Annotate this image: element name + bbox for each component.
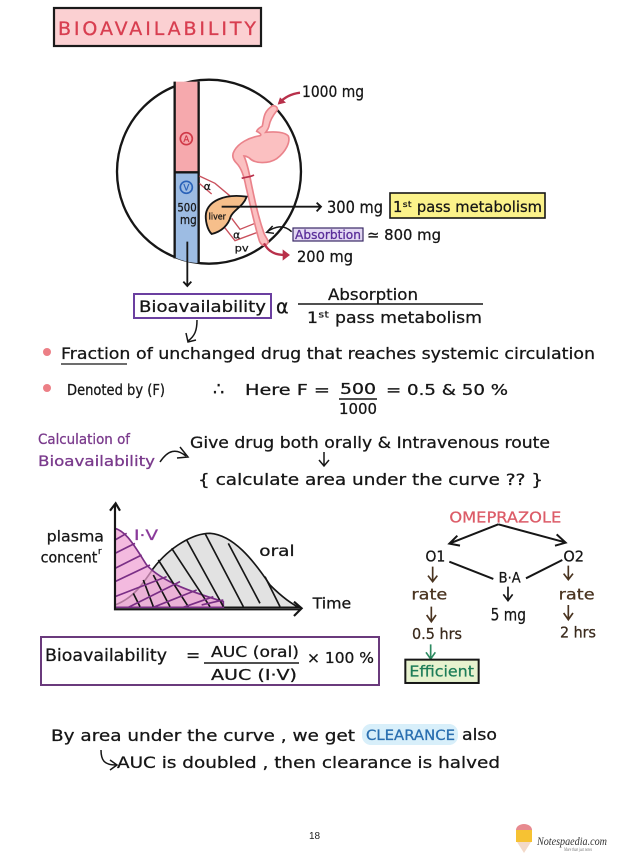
- logo: Notespaedia: [516, 824, 607, 853]
- text: calculate area: { calculate area under the curve ?? }: [198, 470, 543, 489]
- arrow: down: [319, 452, 329, 466]
- text: give drug: Give drug both orally & Intravenous route: [190, 433, 550, 452]
- bioavailability formula: Absorption: [328, 285, 418, 304]
- graph: plasma concentration vs time: I·V: [134, 528, 159, 544]
- page number: 18: [309, 831, 321, 842]
- artery column: A: [183, 135, 189, 145]
- portal vessels to liver: [199, 176, 257, 241]
- diagram: first-pass circle: α: [204, 180, 211, 193]
- O2 path: [559, 566, 596, 642]
- panel: AUC formula: [41, 637, 379, 685]
- callout: absorption: Absorbtion: [295, 228, 361, 242]
- liver: [206, 196, 247, 234]
- clearance note: [51, 724, 500, 772]
- title: BIOAVAILABILITY: [58, 18, 256, 40]
- logo: Notespaedia: More than just notes: [563, 848, 592, 853]
- clearance note: CLEARANCE: [366, 728, 455, 744]
- vein column: 500: [177, 201, 197, 215]
- graph: plasma concentration vs time: [41, 503, 351, 616]
- bullet: denoted by F: ∴: [213, 379, 224, 400]
- BA path: [491, 587, 526, 624]
- omeprazole tree: [405, 508, 596, 683]
- bullet: denoted by F: [43, 379, 508, 418]
- branch arrows: [449, 524, 566, 579]
- graph: plasma concentration vs time: concent: [41, 550, 98, 567]
- graph: plasma concentration vs time: r: [98, 547, 102, 557]
- O1 path: [411, 567, 462, 659]
- label: 300 mg: 300 mg: [327, 198, 383, 218]
- O1 path: rate: [411, 586, 447, 604]
- omeprazole tree: O2: [563, 548, 584, 566]
- clearance note: also: [462, 725, 497, 744]
- vein column: V: [183, 184, 189, 194]
- arrows: [279, 93, 300, 103]
- heading: calculation of bioavailability: Calculation of: [38, 432, 131, 448]
- graph: plasma concentration vs time: oral: [259, 542, 295, 560]
- bullet: denoted by F: = 0.5 & 50 %: [386, 381, 508, 399]
- graph: plasma concentration vs time: Time: [312, 595, 351, 612]
- axes: [110, 503, 302, 616]
- circle outline: [117, 80, 301, 264]
- bioavailability formula: α: [276, 296, 289, 318]
- bioavailability formula: 1ˢᵗ pass metabolism: [307, 308, 482, 327]
- bioavailability formula: Bioavailability: [139, 297, 266, 316]
- bioavailability formula: [134, 285, 483, 342]
- IV curve area: [115, 528, 223, 607]
- label: 1000 mg: 1000 mg: [302, 82, 364, 101]
- arrow: to method: [160, 447, 188, 462]
- omeprazole tree: O1: [425, 548, 445, 566]
- graph: plasma concentration vs time: plasma: [47, 528, 104, 546]
- panel: AUC formula: AUC (I·V): [211, 666, 297, 684]
- logo: Notespaedia: Notespaedia.com: [536, 834, 607, 848]
- efficient box: Efficient: [409, 662, 474, 680]
- O2 path: rate: [559, 586, 595, 604]
- efficient box: [405, 660, 479, 683]
- O1 path: 0.5 hrs: [412, 626, 462, 643]
- diagram: first-pass circle: α: [233, 229, 240, 242]
- O2 path: 2 hrs: [560, 625, 596, 642]
- diagram: first-pass circle: [117, 80, 321, 286]
- bullet: denoted by F: 1000: [339, 400, 377, 418]
- panel: AUC formula: AUC (oral): [211, 643, 299, 661]
- drug name: OMEPRAZOLE: [449, 508, 561, 526]
- clearance note: AUC is doubled , then clearance is halved: [117, 753, 500, 772]
- heading: calculation of bioavailability: [38, 432, 155, 470]
- BA path: 5 mg: [491, 605, 526, 624]
- heading: calculation of bioavailability: Bioavailability: [38, 454, 155, 470]
- title: [54, 8, 261, 46]
- panel: AUC formula: Bioavailability: [45, 646, 167, 666]
- label: 800 mg: ≃ 800 mg: [367, 226, 441, 244]
- vein column: [175, 82, 199, 263]
- stomach and intestine: [233, 106, 289, 245]
- bullet: denoted by F: Here F =: [245, 381, 330, 399]
- liver: liver: [209, 212, 226, 222]
- callout: 1st pass metabolism: 1ˢᵗ pass metabolism: [393, 198, 542, 216]
- diagram: first-pass circle: pv: [235, 243, 249, 254]
- label: 200 mg: 200 mg: [297, 247, 353, 266]
- oral curve area: [115, 533, 298, 607]
- panel: AUC formula: × 100 %: [307, 649, 374, 667]
- omeprazole tree: B·A: [499, 570, 521, 586]
- bullet: definition: Fraction of unchanged drug that reaches systemic circulation: [61, 344, 595, 363]
- panel: AUC formula: =: [186, 646, 200, 666]
- bullet: denoted by F: Denoted by (F): [67, 381, 165, 399]
- artery column: [175, 82, 199, 172]
- vein column: mg: [180, 213, 197, 227]
- clearance note: By area under the curve , we get: [51, 726, 355, 745]
- bullet: denoted by F: 500: [340, 380, 376, 398]
